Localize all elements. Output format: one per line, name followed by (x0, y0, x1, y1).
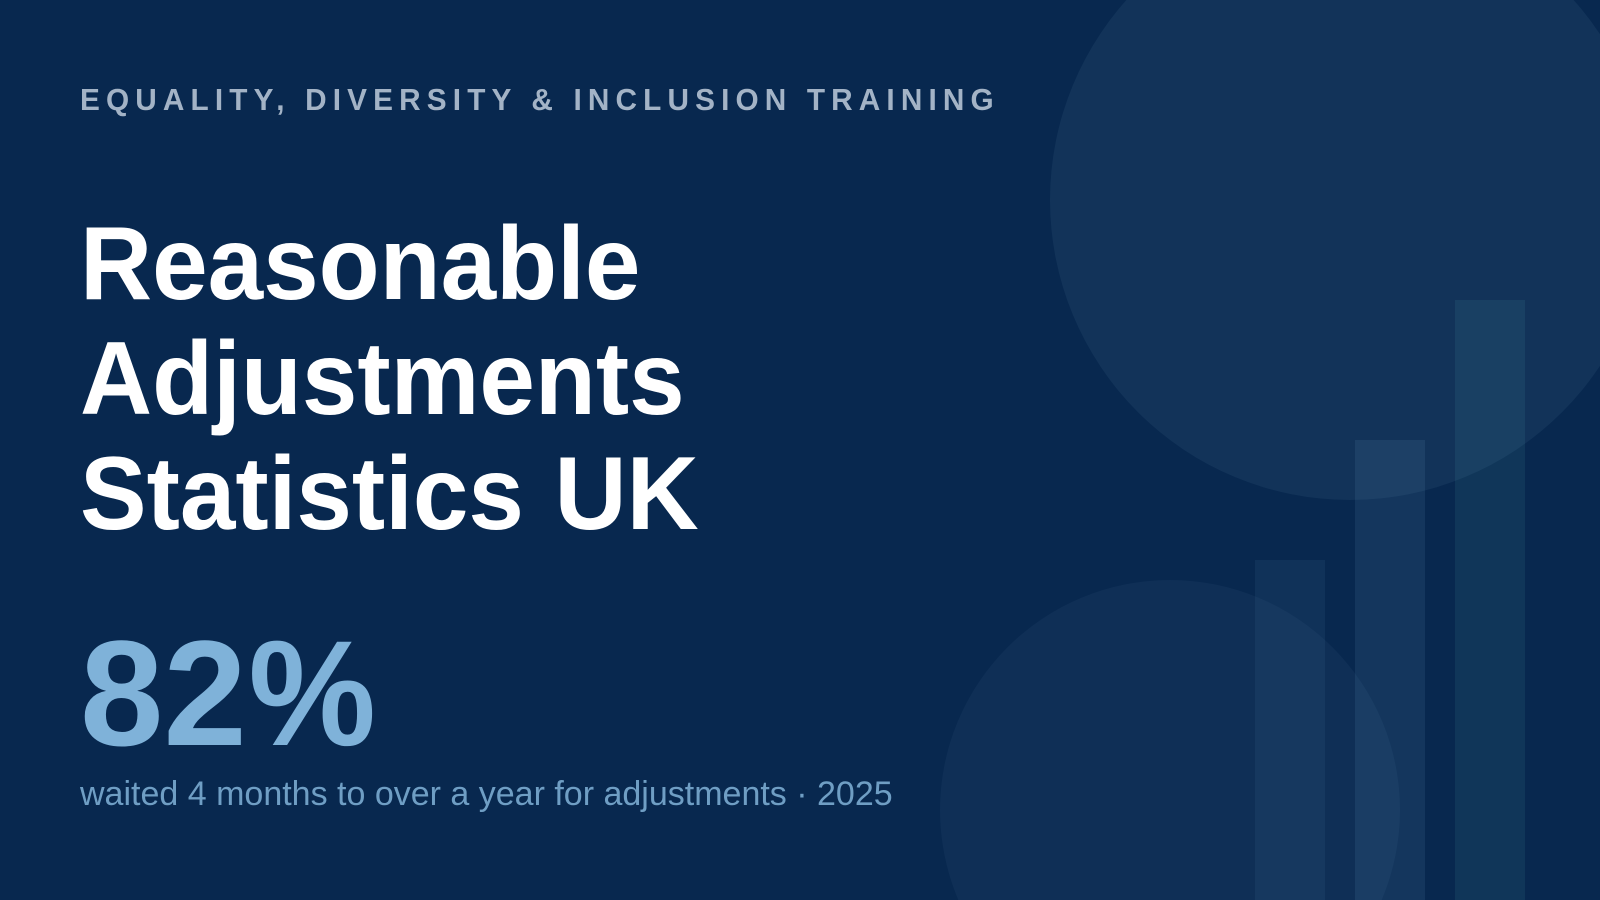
title: Reasonable (80, 206, 640, 322)
title: Adjustments (80, 321, 685, 437)
key statistic (80, 609, 376, 777)
statistic caption: waited 4 months to over a year for adjustments · 2025 (80, 775, 893, 813)
large circle (1050, 0, 1600, 500)
key statistic: 82 (80, 609, 247, 777)
key statistic: % (248, 609, 376, 777)
title (80, 206, 699, 552)
title: Statistics UK (80, 436, 699, 552)
bar 2 (1355, 440, 1425, 900)
bar 1 (1255, 560, 1325, 900)
bar 3 (1455, 300, 1525, 900)
eyebrow heading: EQUALITY, DIVERSITY & INCLUSION TRAINING (80, 82, 1000, 116)
small circle (940, 580, 1400, 900)
